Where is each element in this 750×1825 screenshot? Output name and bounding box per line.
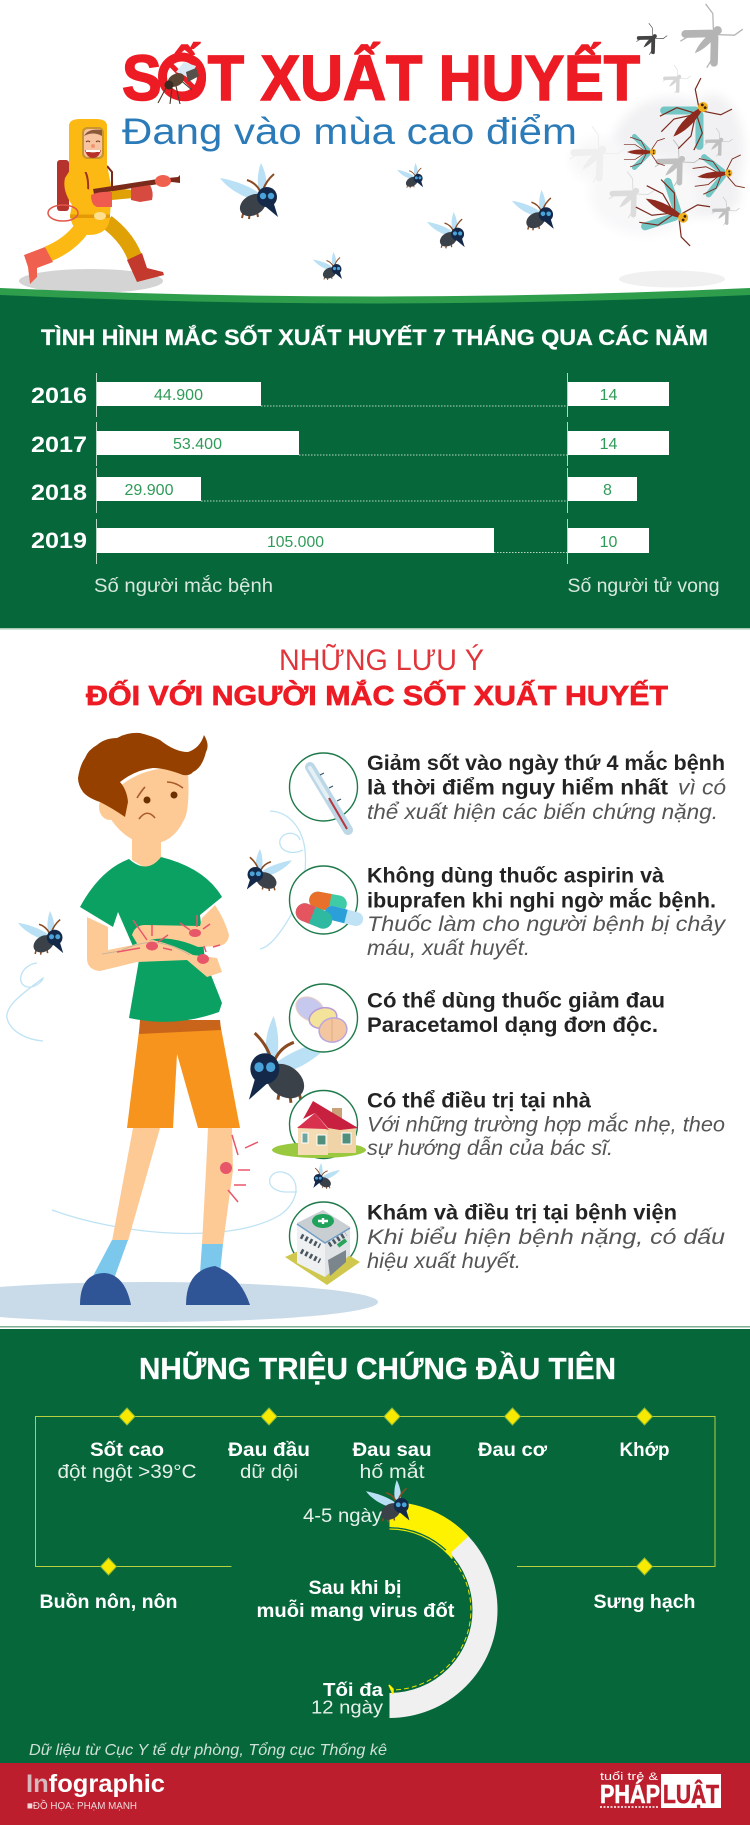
illustration: sick boy <box>0 733 378 1322</box>
label: maximum 12 days: Tối đa <box>323 1680 384 1700</box>
footer brand: Infographic <box>26 1770 165 1798</box>
symptom: headache: Đau đầu <box>228 1440 310 1461</box>
label: after bite <box>256 1578 455 1622</box>
note 4: Với những trường hợp mắc nhẹ, theo <box>367 1114 725 1136</box>
icon: hospital <box>285 1202 360 1285</box>
note 5: Khi biểu hiện bệnh nặng, có dấu <box>367 1226 725 1249</box>
symptom: eye pain: hố mắt <box>360 1461 425 1483</box>
bar chart: cases <box>96 373 568 564</box>
title: SỐT XUẤT HUYẾT <box>122 42 640 114</box>
header illustration: mosquito swarm <box>564 0 745 287</box>
note 1: vì có <box>678 776 726 800</box>
logo: tuổi trẻ & <box>600 1771 659 1783</box>
bar chart: deaths: 14 <box>600 387 618 404</box>
symptom: joint: Khớp <box>620 1440 670 1461</box>
diamonds <box>100 1408 652 1575</box>
label: after bite: muỗi mang virus đốt <box>256 1600 455 1622</box>
year labels: 2017 <box>31 432 87 457</box>
note 1: Giảm sốt vào ngày thứ 4 mắc bệnh <box>367 751 725 775</box>
bar chart: cases: 105.000 <box>267 534 324 551</box>
symptom: headache <box>228 1440 310 1483</box>
logo <box>600 1771 721 1809</box>
symptom: swollen glands: Sưng hạch <box>594 1592 696 1613</box>
year labels: 2016 <box>31 383 87 408</box>
symptom: nausea: Buồn nôn, nôn <box>40 1592 178 1613</box>
symptom: high fever: Sốt cao <box>90 1440 164 1461</box>
icon: mosquito on title <box>158 57 202 104</box>
note 5 <box>367 1202 725 1273</box>
note 5: hiệu xuất huyết. <box>367 1250 521 1273</box>
illustration: man spraying <box>19 119 180 293</box>
icon: pills <box>290 866 365 934</box>
bar chart: deaths <box>568 382 669 553</box>
note 2: máu, xuất huyết. <box>367 937 530 960</box>
symptom: muscle pain: Đau cơ <box>478 1440 548 1461</box>
panel: footer <box>0 1763 750 1825</box>
symptom: eye pain: Đau sau <box>352 1440 432 1461</box>
mosquitoes around the boy <box>18 849 340 1190</box>
symptom: eye pain <box>352 1440 432 1483</box>
subtitle: Đang vào mùa cao điểm <box>122 111 577 152</box>
incubation arc <box>389 1514 485 1706</box>
year labels <box>31 383 87 553</box>
source note: Dữ liệu từ Cục Y tế dự phòng, Tổng cục Thống kê <box>29 1741 387 1759</box>
note 2: Thuốc làm cho người bệnh bị chảy <box>367 913 727 936</box>
note 4: sự hướng dẫn của bác sĩ. <box>367 1137 613 1160</box>
note 3: Paracetamol dạng đơn độc. <box>367 1014 658 1037</box>
label: maximum 12 days <box>311 1680 384 1718</box>
note 2: Không dùng thuốc aspirin và <box>367 864 664 888</box>
bar chart: deaths: 8 <box>603 482 612 499</box>
heading: notes <box>86 643 668 711</box>
connector frame <box>36 1416 715 1566</box>
heading: symptoms: NHỮNG TRIỆU CHỨNG ĐẦU TIÊN <box>139 1350 616 1386</box>
legend: deaths: Số người tử vong <box>568 576 720 597</box>
panel: case statistics <box>0 288 750 630</box>
note 2 <box>367 864 727 960</box>
year labels: 2018 <box>31 480 87 505</box>
note 3: Có thể dùng thuốc giảm đau <box>367 990 665 1012</box>
note 1: thể xuất hiện các biến chứng nặng. <box>367 801 718 824</box>
mosquitoes flying <box>220 163 554 281</box>
bar chart: cases: 44.900 <box>154 387 203 404</box>
symptom: headache: dữ dội <box>240 1462 298 1483</box>
icon: mosquito on arc <box>366 1480 410 1523</box>
note 4: Có thể điều trị tại nhà <box>367 1090 591 1112</box>
logo: PHÁP <box>600 1779 660 1809</box>
symptom: high fever <box>58 1440 196 1483</box>
bar chart: cases: 53.400 <box>173 436 222 453</box>
bar chart: deaths: 14 <box>600 436 618 453</box>
label: maximum 12 days: 12 ngày <box>311 1698 383 1718</box>
heading: notes: ĐỐI VỚI NGƯỜI MẮC SỐT XUẤT HUYẾT <box>86 679 668 711</box>
note 1: là thời điểm nguy hiểm nhất <box>367 776 668 800</box>
note 3 <box>367 990 665 1037</box>
footer credit: ■ĐỒ HỌA: PHẠM MẠNH <box>27 1799 137 1812</box>
note 4 <box>367 1090 725 1160</box>
heading: statistics: TÌNH HÌNH MẮC SỐT XUẤT HUYẾT 7 THÁNG QUA CÁC NĂM <box>41 324 708 350</box>
bar chart: deaths: 10 <box>600 534 618 551</box>
panel: symptoms <box>0 1326 750 1764</box>
logo: LUẬT <box>663 1779 719 1809</box>
note 5: Khám và điều trị tại bệnh viện <box>367 1202 677 1224</box>
heading: notes: NHỮNG LƯU Ý <box>279 643 484 677</box>
icon: thermometer <box>290 753 358 830</box>
note 1 <box>367 751 726 824</box>
icon: tablets <box>290 984 358 1052</box>
icon: house <box>272 1090 366 1158</box>
legend: cases: Số người mắc bệnh <box>94 575 273 597</box>
label: 4-5 days: 4-5 ngày <box>303 1506 383 1527</box>
year labels: 2019 <box>31 528 87 553</box>
bar chart: cases: 29.900 <box>124 482 174 499</box>
label: after bite: Sau khi bị <box>308 1578 402 1599</box>
symptom: high fever: đột ngột >39°C <box>58 1462 196 1483</box>
note 2: ibuprafen khi nghi ngờ mắc bệnh. <box>367 888 716 912</box>
